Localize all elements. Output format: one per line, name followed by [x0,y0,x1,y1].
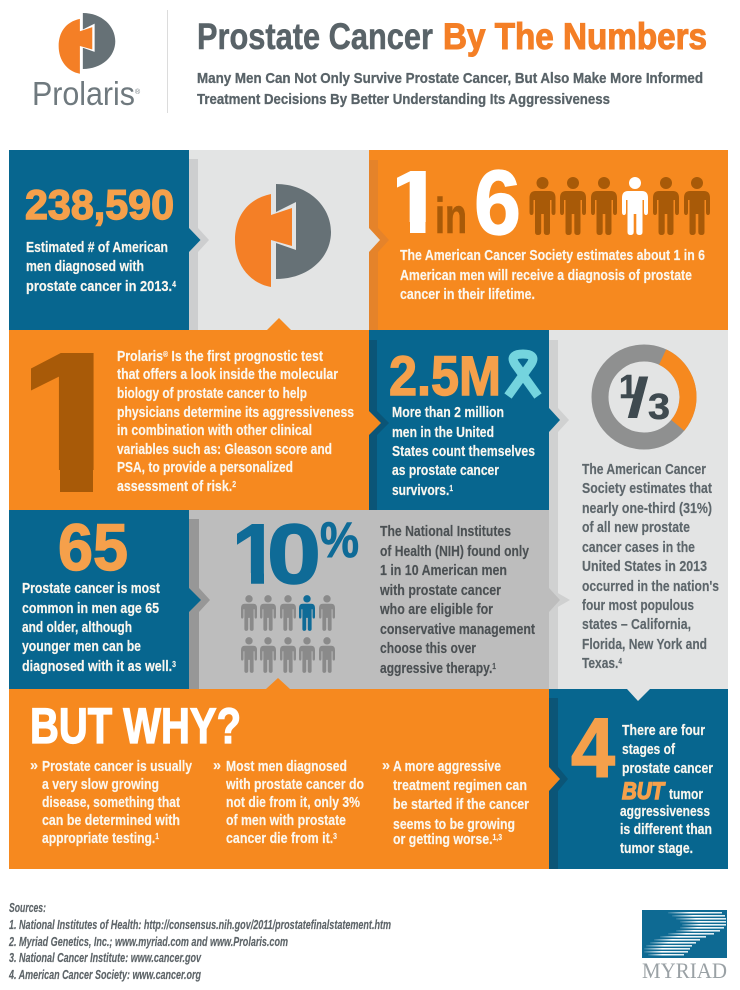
logo: Myriad [642,910,727,983]
panel: 238,590: 4 [172,280,176,289]
panel: 2.5M survivors [369,330,569,510]
text: reason one: Prostate cancer is usually [42,759,192,775]
header: Prolaris logo [32,13,141,112]
text: Prolaris description: in combination with other clinical [117,423,312,439]
text: reason one [30,758,192,847]
header: Prolaris logo: Prolaris [32,75,135,112]
text: reason three: » [382,758,390,774]
text: survivors description: men in the United [392,425,494,441]
text: Prolaris description: Prolaris [117,349,171,365]
panel: But why [9,678,549,869]
panel: 4 stages: BUT [622,778,666,805]
text: reason two: cancer die from it. [226,831,351,847]
panel: Prolaris first test [9,318,369,510]
panel: 4 stages: There are four [622,723,705,739]
text: one third description: of all new prostate [582,520,690,536]
text: NIH description: of Health (NIH) found only [380,544,529,560]
text: survivors description: as prostate cancer [392,463,499,479]
header: Prolaris logo: ® [135,88,141,96]
panel: 65: younger men can be [22,639,141,655]
text: Prolaris description: PSA, to provide a personalized [117,460,293,476]
text: reason three: treatment regimen can [393,778,527,794]
text: Prolaris description: 2 [232,480,236,489]
sources: 3. National Cancer Institute: www.cancer.gov [9,951,202,965]
panel: 10 percent: 1 [232,507,279,601]
text: reason three: 1,3 [493,833,502,842]
text: Prolaris description: variables such as: Gleason score and [117,442,332,458]
text: NIH description: The National Institutes [380,524,511,540]
text: NIH description [379,524,535,677]
sources: 1. National Institutes of Health: http://consensus.nih.gov/2011/prostatefinalstatement.htm [9,918,391,932]
panel: Prolaris first test: 1 [0,310,140,535]
chart: one third donut [600,353,688,441]
text: reason two: Most men diagnosed [226,759,347,775]
panel: 65: 3 [172,660,176,669]
panel: 238,590: men diagnosed with [26,259,144,275]
chart: one third donut: 1 [619,368,637,405]
text: reason two [213,758,364,847]
panel: logo centre [189,150,369,330]
text: NIH description: with prostate cancer [379,583,501,599]
text: reason one: can be determined with [42,813,180,829]
panel: 65: diagnosed with it as well. [22,659,196,675]
text: NIH description: 1 [492,662,496,671]
text: NIH description: aggressive therapy. [380,661,515,677]
heading: But why: BUT WHY? [30,698,241,754]
text: reason two: of men with prostate [226,813,346,829]
panel: 4 stages: tumor stage. [620,841,693,857]
panel: 65: common in men age 65 [22,601,159,617]
text: reason two: 3 [333,832,337,841]
text: survivors description: States count themselves [392,444,535,460]
panel: 4 stages [549,689,728,869]
text: Prolaris description: that offers a look inside the molecular [117,367,338,383]
text: reason two: with prostate cancer do [225,777,364,793]
text: one third description: The American Cancer [582,462,706,478]
panel: 238,590: 238,590 [25,181,174,228]
text: survivors description: More than 2 million [392,405,504,421]
panel: 4 stages: prostate cancer [622,761,713,777]
sources [8,901,391,982]
text: 1 in 6 description: American men will receive a diagnosis of prostate [400,268,692,284]
text: one third description: Society estimates that [582,481,712,497]
text: NIH description: choose this over [380,641,476,657]
text: NIH description: 1 in 10 American men [380,563,507,579]
icon: Prolaris mark [235,184,331,287]
panel: 2.5M survivors: 2.5M [389,344,501,407]
panel: 10 percent: 0 [267,507,321,601]
text: Prolaris description [117,349,354,495]
title: By The Numbers [443,16,707,57]
text: reason one: 1 [155,832,159,841]
text: 1 in 6 description: cancer in their lifetime. [400,287,535,303]
panel: 65: and older, although [22,620,132,636]
text: one third description: nearly one-third (31%) [582,501,712,517]
text: one third description: cancer cases in the [582,540,695,556]
panel: 10 percent: % [320,512,359,568]
text: survivors description [392,405,535,499]
chart: one third donut: / [627,366,650,429]
panel: 10 percent [189,507,570,689]
sources: Sources: [9,901,46,915]
panel: 1 in 6: in [435,188,467,244]
panel: 238,590 [9,150,209,330]
title [197,16,707,57]
panel: 4 stages: tumor [669,787,703,803]
panel: 1 in 6 [369,150,728,330]
text: reason three: A more aggressive [393,759,501,775]
text: one third description: Texas. [582,656,626,672]
text: reason three [382,758,529,848]
panel: 1 in 6: 6 [474,152,521,254]
panel: 238,590: Estimated # of American [26,240,168,256]
text: one third description [582,462,719,672]
panel: 4 stages: stages of [622,742,675,758]
title: Prostate Cancer [197,16,433,57]
text: reason three: be started if the cancer [393,797,529,813]
panel: 1 in 6: 1 [382,153,447,253]
icon: ten people [241,595,335,673]
panel: right light grey, one third [549,330,728,689]
text: one third description: four most populous [582,598,694,614]
panel: 65: Prostate cancer is most [22,581,160,597]
text: Prolaris description: biology of prostate cancer to help [117,386,307,402]
text: survivors description: 1 [449,484,453,493]
text: Prolaris description: ® [163,350,168,359]
panel: 65: 65 [58,510,128,584]
text: one third description: Florida, New York and [582,637,707,653]
text: Prolaris description: Is the first prognostic test [168,349,323,365]
panel: 4 stages: 4 [571,701,615,795]
logo: Myriad: MYRIAD [642,958,727,983]
text: one third description: United States in 2013 [582,559,707,575]
text: one third description: 4 [618,657,622,666]
text: one third description: states – California, [582,617,691,633]
chart: one third donut: 3 [648,386,670,427]
text: Prolaris description: physicians determine its aggressiveness [117,405,354,421]
text: 1 in 6 description [400,248,705,303]
sources: 2. Myriad Genetics, Inc.; www.myriad.com and www.Prolaris.com [8,935,288,949]
icon: awareness ribbon [508,354,538,396]
text: reason one: a very slow growing [42,777,159,793]
text: Prolaris description: assessment of risk. [117,479,252,495]
panel: 238,590: prostate cancer in 2013. [26,279,191,295]
text: reason three: or getting worse. [393,832,510,848]
subtitle [197,70,703,108]
subtitle: Treatment Decisions By Better Understanding Its Aggressiveness [197,91,610,108]
text: NIH description: who are eligible for [379,602,493,618]
text: reason one: appropriate testing. [42,831,177,847]
panel: 4 stages: aggressiveness [620,804,710,820]
text: reason two: not die from it, only 3% [226,795,360,811]
text: NIH description: conservative management [380,622,535,638]
sources: 4. American Cancer Society: www.cancer.org [8,968,201,982]
text: reason one: » [30,758,38,774]
text: reason three: seems to be growing [393,817,515,833]
panel: 4 stages: is different than [620,822,712,838]
text: survivors description: survivors. [392,483,461,499]
text: reason two: » [213,758,221,774]
panel: 65 [9,510,201,689]
icon: six people [530,177,710,235]
text: reason one: disease, something that [42,795,180,811]
